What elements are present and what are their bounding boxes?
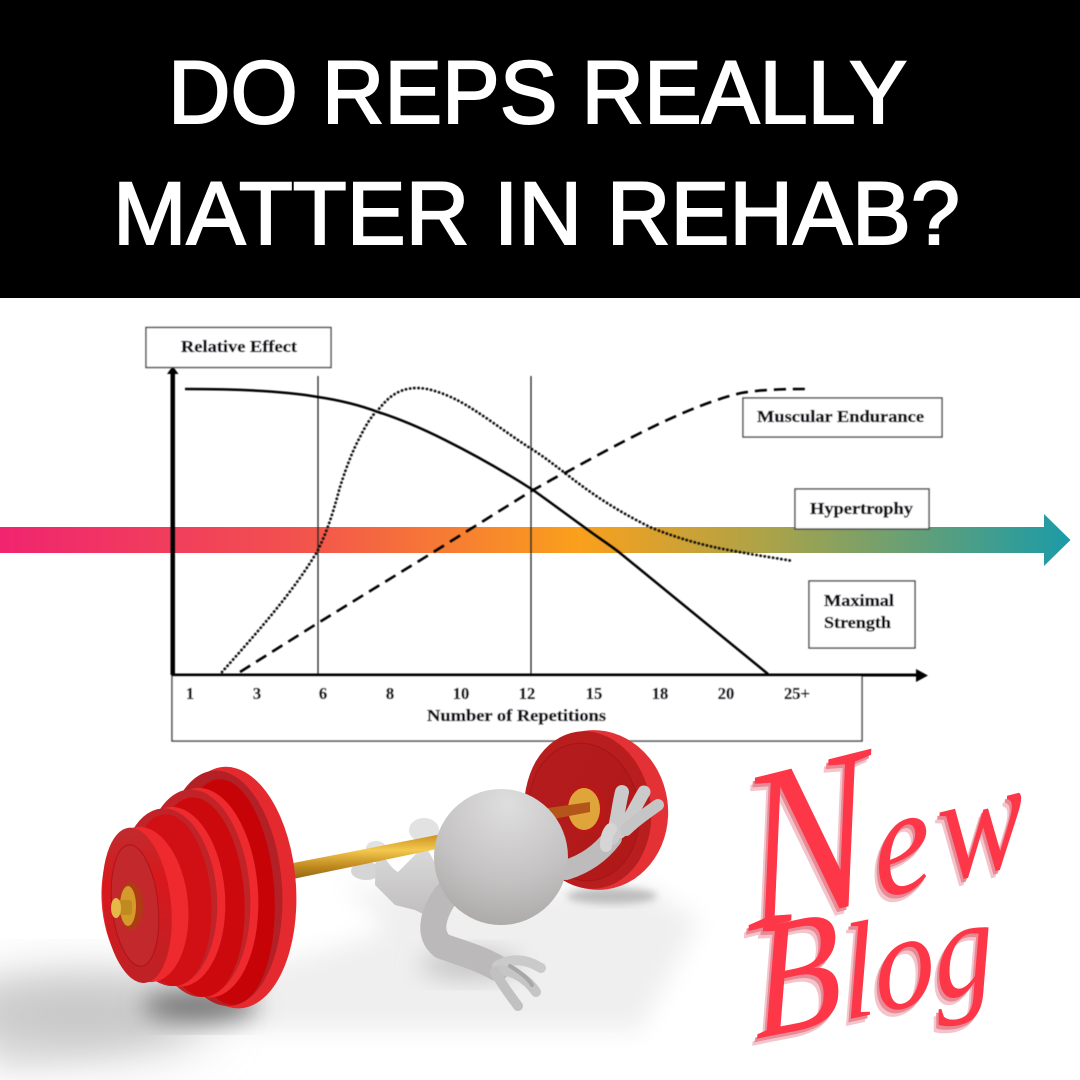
x axis numbers: 1 xyxy=(186,684,194,703)
title banner xyxy=(0,0,1080,298)
main bar xyxy=(288,834,442,880)
raised arm and hand xyxy=(566,792,658,870)
x axis numbers xyxy=(186,684,810,703)
x axis numbers: 20 xyxy=(718,684,734,703)
x axis numbers: 6 xyxy=(319,684,327,703)
stacked plates xyxy=(94,762,304,1013)
x axis xyxy=(172,669,928,682)
x axis numbers: 15 xyxy=(586,684,602,703)
far hub xyxy=(548,784,606,834)
x axis numbers: 8 xyxy=(386,684,394,703)
box: muscular endurance xyxy=(743,398,942,437)
lower arm and hand xyxy=(433,895,541,1006)
box: maximal strength: Strength xyxy=(824,613,891,632)
box: maximal strength xyxy=(809,581,915,648)
plate 4 xyxy=(94,822,196,987)
box: number of repetitions axis xyxy=(172,675,862,741)
box: muscular endurance: Muscular Endurance xyxy=(757,407,924,426)
title line 1: DO REPS REALLY xyxy=(168,42,907,142)
word: New: New xyxy=(729,697,1041,980)
chart: repetitions vs relative effect xyxy=(146,328,942,741)
x axis numbers: 12 xyxy=(519,684,535,703)
box: relative effect xyxy=(146,328,331,368)
word: Blog: Blog xyxy=(745,868,998,1075)
curve: muscular endurance xyxy=(240,389,809,672)
x axis numbers: 10 xyxy=(453,684,469,703)
box: maximal strength: Maximal xyxy=(824,591,894,610)
y axis xyxy=(167,366,178,675)
far plate xyxy=(514,721,678,899)
floor shadows xyxy=(0,884,700,1075)
x axis numbers: 3 xyxy=(253,684,261,703)
curve: maximal strength xyxy=(185,389,768,674)
head xyxy=(434,789,568,925)
plate 1 xyxy=(154,762,304,1013)
near hub xyxy=(111,882,143,930)
plate 3 xyxy=(113,804,231,990)
plate 2 xyxy=(135,784,265,1002)
x axis numbers: 25+ xyxy=(784,684,810,703)
x axis title: Number of Repetitions xyxy=(427,706,607,725)
x axis numbers: 18 xyxy=(652,684,668,703)
curve: hypertrophy xyxy=(222,388,793,672)
figure legs and torso xyxy=(351,818,450,925)
box: relative effect: Relative Effect xyxy=(181,337,298,356)
title line 2: MATTER IN REHAB? xyxy=(113,163,960,263)
box: hypertrophy: Hypertrophy xyxy=(810,499,914,518)
illustration: figure crushed by barbell xyxy=(0,721,700,1075)
box: hypertrophy xyxy=(795,489,929,529)
vertical marker lines xyxy=(318,376,531,675)
gradient arrow xyxy=(0,514,1070,566)
